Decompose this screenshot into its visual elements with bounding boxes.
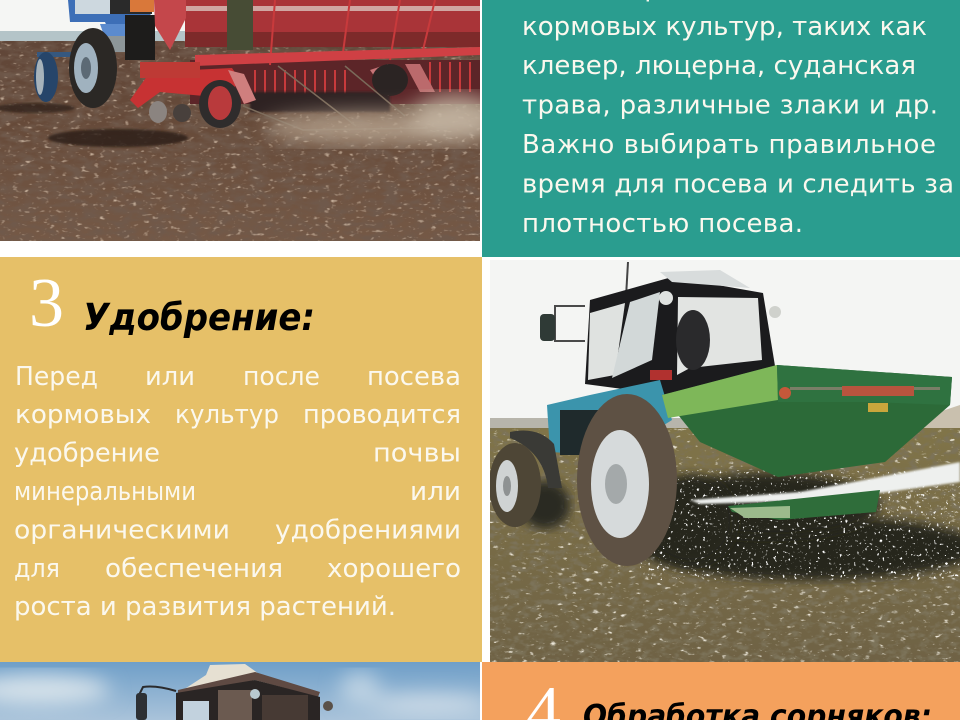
fertilizing body text: хорошего bbox=[327, 554, 461, 584]
mirror bbox=[136, 686, 176, 720]
tractor cab bbox=[585, 270, 781, 396]
big wheel bbox=[577, 394, 677, 566]
antenna and mirror bbox=[540, 262, 628, 341]
fertilizing body text: проводится bbox=[303, 400, 461, 430]
fertilizing body text: для bbox=[14, 554, 60, 584]
sowing body text: плотностью посева. bbox=[522, 209, 803, 239]
sowing body text: трава, различные злаки и др. bbox=[522, 90, 938, 120]
panel: orange weed control bbox=[482, 662, 960, 720]
fertilizing body text: культур bbox=[175, 400, 279, 430]
red seeder bbox=[130, 0, 480, 130]
panel: teal seeding text bbox=[482, 0, 960, 257]
photo: tractor cab against blue sky bbox=[0, 662, 490, 720]
fertilizing body text: роста и развития растений. bbox=[14, 592, 396, 622]
fertilizing body text: минеральными bbox=[14, 477, 196, 507]
fertilizing body text: посева bbox=[367, 362, 461, 392]
photo: tractor with green fertilizer spreader bbox=[489, 260, 960, 662]
panel: yellow fertilizing bbox=[0, 257, 482, 662]
fertilizing body text: кормовых bbox=[15, 400, 151, 430]
cab roof bbox=[178, 664, 320, 698]
green hopper bbox=[662, 365, 952, 520]
section number 3: 3 bbox=[29, 265, 64, 342]
fertilizing body text: обеспечения bbox=[105, 554, 283, 584]
fertilizing body text: после bbox=[243, 362, 320, 392]
fertilizing body text: Перед bbox=[15, 362, 98, 392]
sowing body text: кормовых культур, таких как bbox=[522, 12, 927, 42]
fertilizing body text: органическими bbox=[14, 516, 230, 546]
sowing body text: клевер, люцерна, суданская bbox=[522, 51, 916, 81]
tractor bbox=[34, 0, 155, 108]
sowing body text: Важно выбирать правильное bbox=[522, 130, 936, 160]
fertilizing body text: почвы bbox=[373, 438, 461, 468]
blue engine hood bbox=[510, 380, 672, 488]
heading: fertilizing: Удобрение: bbox=[83, 296, 315, 339]
fertilizing body text: или bbox=[410, 477, 461, 507]
sowing body text bbox=[522, 0, 954, 239]
dust cloud bbox=[265, 94, 500, 144]
fertilizing body text: удобрениями bbox=[275, 516, 461, 546]
fertilizing body text: удобрение bbox=[14, 438, 160, 468]
fertilizing body text bbox=[14, 362, 461, 622]
fertilizing body text: или bbox=[145, 362, 195, 392]
photo: tractor with red seeder on ploughed soil bbox=[0, 0, 500, 241]
cab body bbox=[176, 680, 333, 720]
spreader spray on ground bbox=[520, 462, 960, 580]
rear wheel bbox=[489, 443, 541, 527]
sowing body text: время для посева и следить за bbox=[522, 170, 954, 200]
